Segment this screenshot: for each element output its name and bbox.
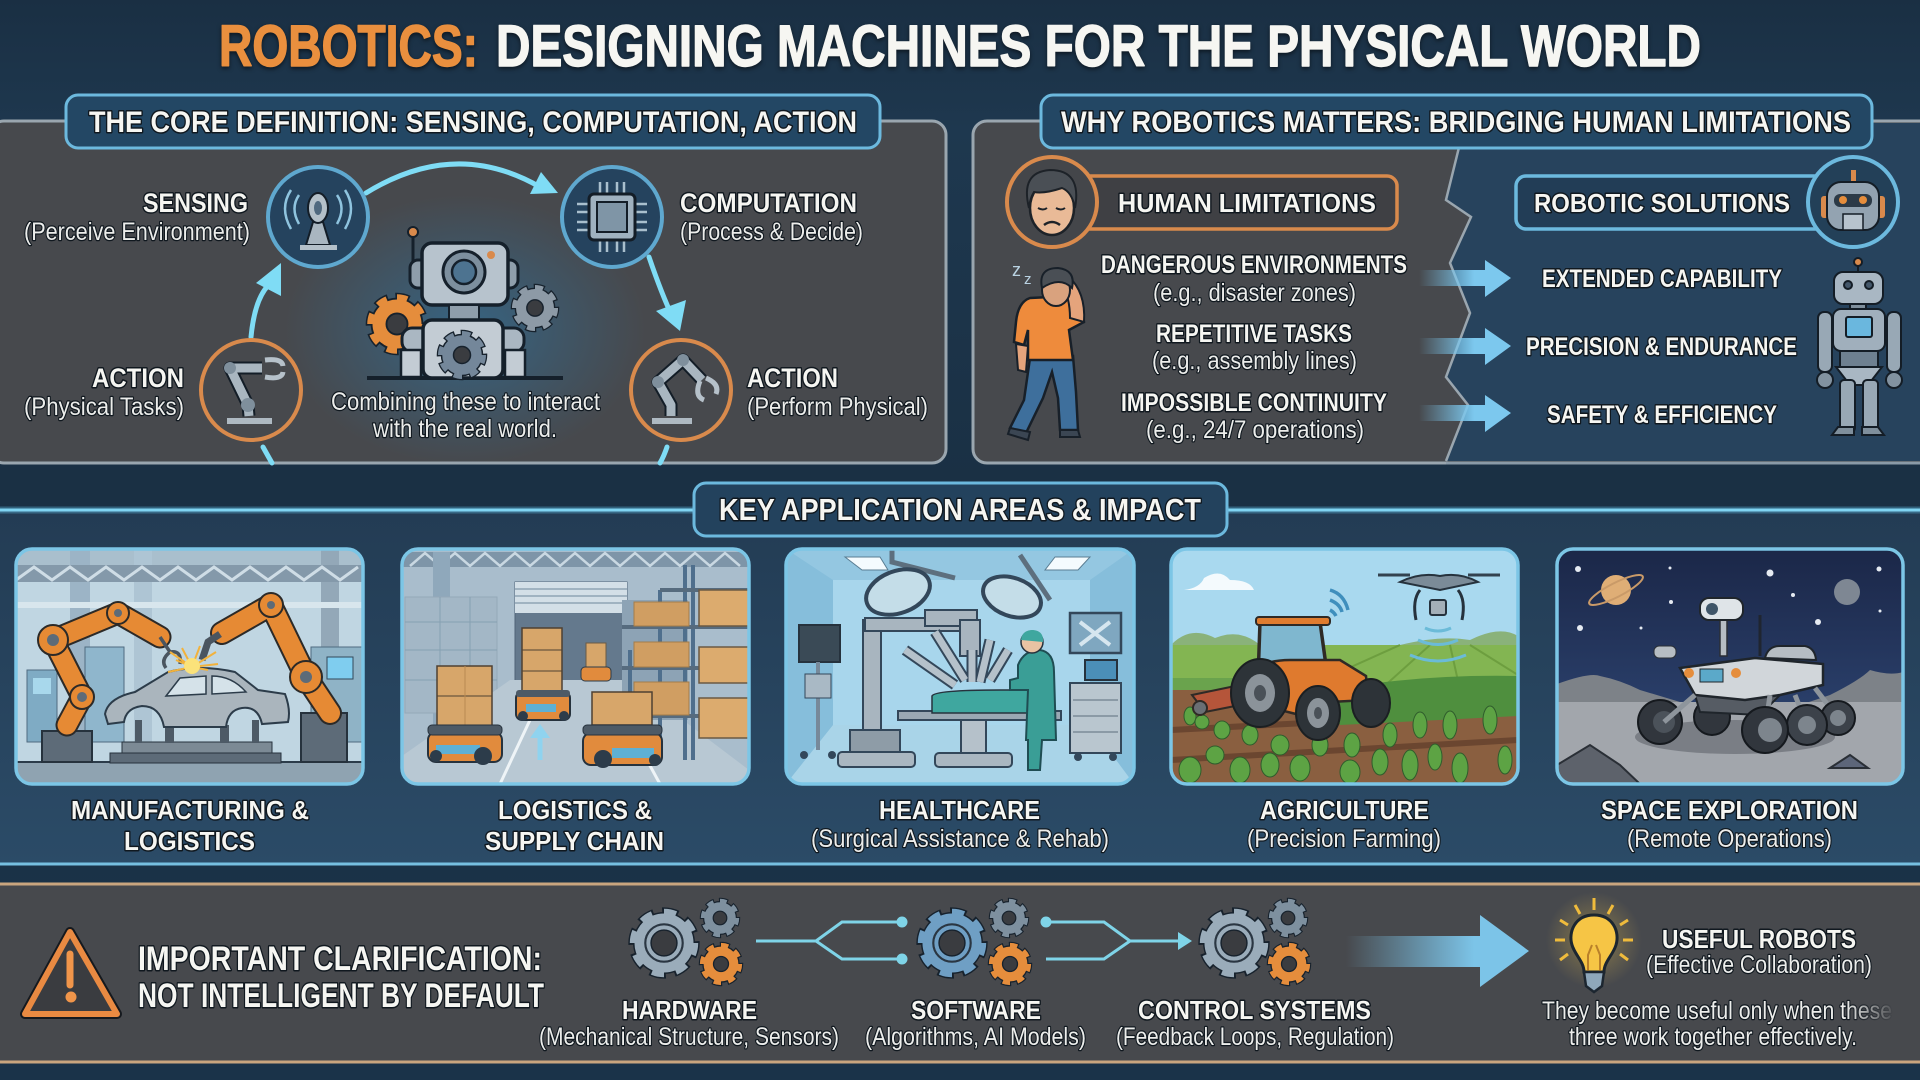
card: logistics (402, 549, 749, 784)
label: agriculture (1247, 795, 1441, 853)
right robot (592, 692, 652, 725)
card: manufacturing (16, 549, 363, 784)
label: action right (747, 363, 928, 421)
label: space exploration (1601, 795, 1858, 853)
label: sensing: (Perceive Environment) (24, 218, 250, 246)
title: DESIGNING MACHINES FOR THE PHYSICAL WORLD (496, 14, 1701, 79)
icon: tired person: z (1012, 260, 1021, 280)
icon: action left arm (201, 340, 301, 440)
icon: robot head (1808, 157, 1898, 247)
label: sensing: SENSING (143, 188, 248, 218)
heading: key application areas (694, 483, 1227, 536)
card: space exploration (1557, 549, 1903, 784)
title: ROBOTICS: (219, 14, 478, 79)
icon: tired face (1007, 157, 1097, 247)
label: agriculture: (Precision Farming) (1247, 825, 1441, 853)
icon: action right arm (631, 340, 731, 440)
heading: why robotics matters (1041, 95, 1872, 148)
label: useful robots (1646, 924, 1872, 979)
limitation: impossible continuity (1121, 389, 1387, 444)
text: conclusion: three work together effectively. (1569, 1023, 1857, 1051)
heading: why robotics matters: WHY ROBOTICS MATTERS: BRIDGING HUMAN LIMITATIONS (1061, 106, 1851, 139)
panel: why robotics matters (973, 95, 1920, 463)
floor (402, 680, 749, 784)
label: space exploration: (Remote Operations) (1627, 825, 1832, 853)
arrow: repetitive to precision (1419, 328, 1511, 365)
label: computation: COMPUTATION (680, 188, 857, 218)
drone (1378, 574, 1500, 576)
icon: central robot (367, 227, 563, 378)
label: logistics: SUPPLY CHAIN (485, 826, 664, 856)
panel: core definition (0, 95, 946, 465)
icon: tired person: z (1024, 271, 1032, 288)
label: logistics (485, 795, 664, 856)
shelving (622, 600, 688, 720)
label: action left: (Physical Tasks) (24, 393, 184, 421)
label: computation (680, 188, 863, 246)
limitation: repetitive tasks (1152, 320, 1357, 375)
arrow: to useful robots (1346, 915, 1529, 987)
card: agriculture (1171, 549, 1518, 784)
operating table (898, 711, 1061, 720)
grey gear (515, 288, 555, 328)
label: agriculture: AGRICULTURE (1260, 795, 1429, 825)
solution: precision and endurance: PRECISION & ENDURANCE (1526, 333, 1797, 361)
icon: warning triangle (25, 932, 117, 1014)
far robot (586, 643, 606, 667)
connector: software to control (1042, 918, 1192, 959)
panel: important clarification (0, 884, 1920, 1062)
solutions side (1446, 123, 1920, 461)
crop rows (1179, 706, 1512, 784)
cycle arrowheads (256, 172, 686, 331)
label: sensing (24, 188, 250, 246)
right arm (222, 605, 330, 713)
rover (1720, 620, 1727, 656)
car body (105, 668, 289, 727)
label: action left: ACTION (92, 363, 184, 393)
heading: core definition: THE CORE DEFINITION: SENSING, COMPUTATION, ACTION (89, 106, 857, 139)
label: useful robots: (Effective Collaboration) (1646, 951, 1872, 979)
centre glow (285, 195, 645, 465)
cart (1085, 660, 1117, 680)
caption: combining (331, 388, 600, 443)
icon: control gears (1204, 901, 1307, 982)
arrow: continuity to safety (1419, 395, 1511, 432)
limitation: dangerous environments: (e.g., disaster zones) (1153, 279, 1356, 307)
icon: sensing (268, 167, 368, 267)
label: healthcare (811, 795, 1109, 853)
label: action right: ACTION (747, 363, 838, 393)
label: computation: (Process & Decide) (680, 218, 863, 246)
heading: clarification (138, 940, 544, 1015)
limitation: dangerous environments (1101, 251, 1407, 307)
heading: robotic solutions (1516, 176, 1826, 229)
limitation: impossible continuity: IMPOSSIBLE CONTINUITY (1121, 389, 1387, 417)
label: hardware: (Mechanical Structure, Sensors) (539, 1023, 839, 1051)
limitation: repetitive tasks: (e.g., assembly lines) (1152, 347, 1357, 375)
label: hardware: HARDWARE (622, 995, 757, 1025)
heading: clarification: NOT INTELLIGENT BY DEFAULT (138, 977, 544, 1015)
label: manufacturing (71, 795, 309, 856)
solution: safety and efficiency: SAFETY & EFFICIENCY (1547, 401, 1777, 429)
label: control systems: CONTROL SYSTEMS (1138, 995, 1371, 1025)
label: control systems (1116, 995, 1394, 1051)
card: healthcare (786, 549, 1134, 784)
heading: core definition (66, 95, 880, 148)
heading: robotic solutions: ROBOTIC SOLUTIONS (1534, 188, 1790, 218)
label: logistics: LOGISTICS & (498, 795, 652, 825)
heading: human limitations: HUMAN LIMITATIONS (1118, 188, 1376, 218)
arrow: dangerous to capability (1419, 260, 1511, 297)
limitation: dangerous environments: DANGEROUS ENVIRONMENTS (1101, 251, 1407, 279)
surgical robot (863, 620, 881, 730)
icon: light bulb (1546, 892, 1642, 992)
caption: combining: with the real world. (372, 415, 557, 443)
heading: human limitations (1060, 176, 1397, 229)
limitation: impossible continuity: (e.g., 24/7 operations) (1146, 416, 1364, 444)
connector: hardware to software (756, 918, 906, 963)
cycle arrows (251, 164, 673, 463)
label: hardware (539, 995, 839, 1051)
label: useful robots: USEFUL ROBOTS (1662, 924, 1856, 954)
label: healthcare: (Surgical Assistance & Rehab) (811, 825, 1109, 853)
left robot (437, 666, 492, 727)
orange gear (371, 298, 423, 350)
icon: hardware gears (634, 901, 739, 982)
icon: standing robot (1817, 258, 1902, 435)
label: healthcare: HEALTHCARE (879, 795, 1040, 825)
surgeon (1010, 650, 1056, 770)
left arm (53, 613, 160, 725)
icon: tired person (1008, 260, 1084, 440)
label: action right: (Perform Physical) (747, 393, 928, 421)
label: control systems: (Feedback Loops, Regulation) (1116, 1023, 1394, 1051)
solution: extended capability: EXTENDED CAPABILITY (1542, 265, 1782, 293)
icon: software gears (922, 901, 1028, 982)
label: manufacturing: LOGISTICS (124, 826, 255, 856)
caption: combining: Combining these to interact (331, 388, 600, 416)
icon: computation chip (562, 167, 662, 267)
middle robot (522, 628, 562, 692)
panel: key application areas (0, 483, 1920, 864)
label: software: (Algorithms, AI Models) (865, 1023, 1086, 1051)
label: manufacturing: MANUFACTURING & (71, 795, 309, 825)
tractor (1190, 686, 1232, 713)
monitors (799, 625, 840, 662)
label: space exploration: SPACE EXPLORATION (1601, 795, 1858, 825)
heading: clarification: IMPORTANT CLARIFICATION: (138, 940, 542, 978)
rocks (1557, 745, 1640, 784)
label: software (865, 995, 1086, 1051)
label: software: SOFTWARE (911, 995, 1041, 1025)
welding sparks (168, 646, 218, 672)
label: action left (24, 363, 184, 421)
heading: key application areas: KEY APPLICATION AREAS & IMPACT (719, 492, 1201, 527)
text: conclusion (1542, 995, 1895, 1051)
limitation: repetitive tasks: REPETITIVE TASKS (1156, 320, 1352, 348)
